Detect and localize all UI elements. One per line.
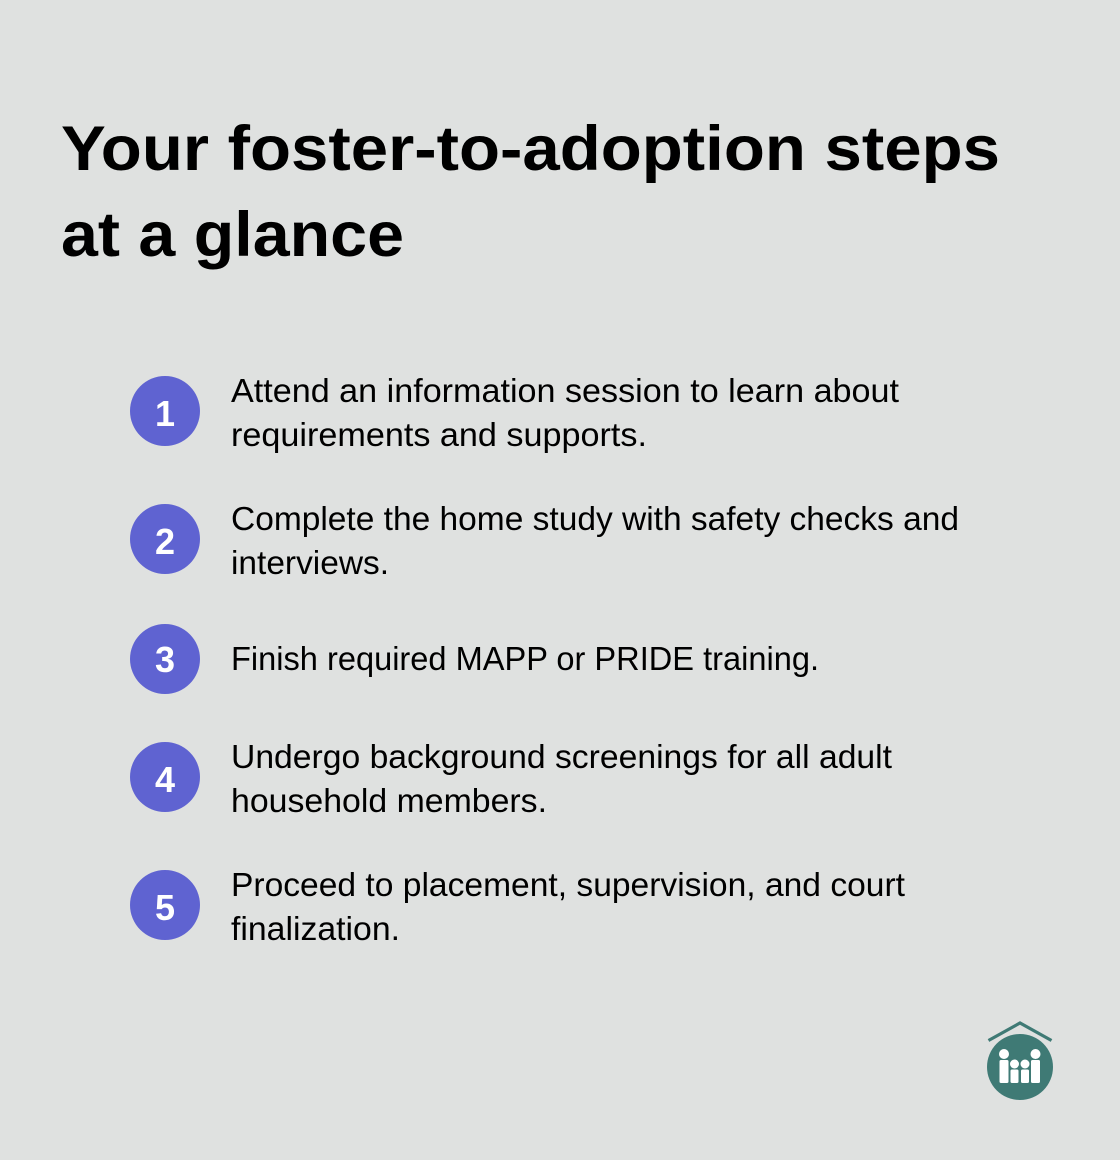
- step 2 text: Complete the home study with safety checks and: [231, 500, 959, 537]
- step 4 text: [231, 738, 892, 819]
- step 2 text: interviews.: [231, 544, 389, 581]
- step 3 number badge: [130, 624, 200, 694]
- step 1 text: [231, 372, 899, 453]
- icon: family in house logo: [987, 1023, 1053, 1100]
- step 4: [130, 738, 892, 819]
- step 5 text: Proceed to placement, supervision, and court: [231, 866, 905, 903]
- step 4 text: household members.: [231, 782, 547, 819]
- step 1: [130, 372, 899, 453]
- step 2 number badge: [130, 504, 200, 574]
- step 5 text: [231, 866, 905, 947]
- step 4 number badge: [130, 742, 200, 812]
- step 5 number badge: 5: [155, 887, 175, 928]
- step 1 text: Attend an information session to learn about: [231, 372, 899, 409]
- step 5 text: finalization.: [231, 910, 400, 947]
- step 3 number badge: 3: [155, 639, 175, 680]
- step 5 number badge: [130, 870, 200, 940]
- step 1 number badge: [130, 376, 200, 446]
- title: [61, 114, 1000, 270]
- step 4 number badge: 4: [155, 759, 175, 800]
- title: Your foster-to-adoption steps: [61, 114, 1000, 184]
- step 3: [130, 624, 819, 694]
- step 4 text: Undergo background screenings for all adult: [231, 738, 892, 775]
- step 1 text: requirements and supports.: [231, 416, 647, 453]
- step 2: [130, 500, 959, 581]
- step 2 number badge: 2: [155, 521, 175, 562]
- step 1 number badge: 1: [155, 393, 175, 434]
- step 3 text: Finish required MAPP or PRIDE training.: [231, 640, 819, 677]
- title: at a glance: [61, 200, 404, 270]
- step 2 text: [231, 500, 959, 581]
- step 5: [130, 866, 905, 947]
